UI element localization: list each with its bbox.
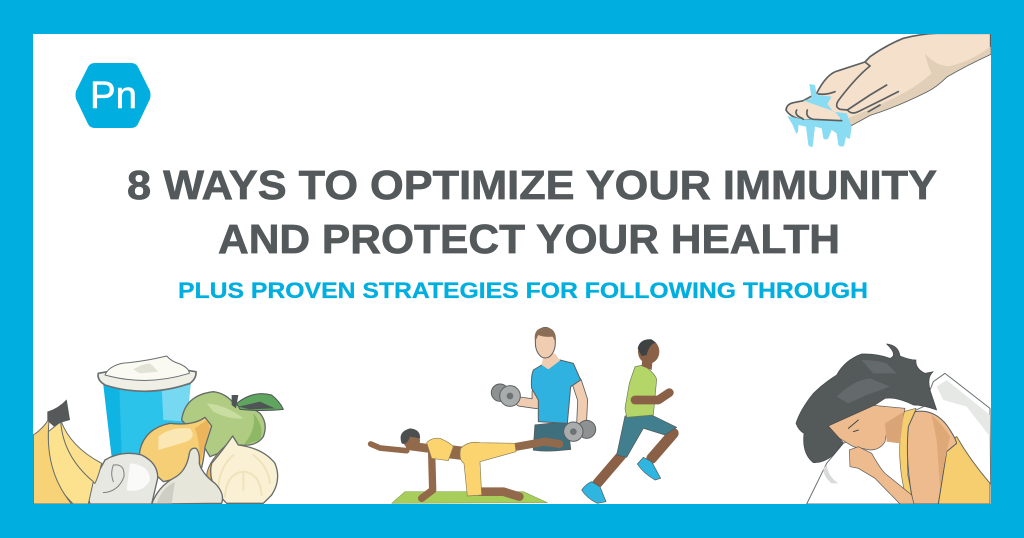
figure: runner [582, 339, 677, 503]
icon: white onion [207, 436, 278, 503]
figure: woman balancing on yoga mat [371, 428, 559, 503]
icon: hand with soap water [786, 33, 991, 147]
illustration: healthy foods [33, 356, 283, 504]
icon: yellow onion [140, 417, 212, 482]
title [127, 162, 937, 262]
subtitle: PLUS PROVEN STRATEGIES FOR FOLLOWING THROUGH [178, 278, 868, 303]
water [787, 84, 852, 147]
illustration: people exercising [371, 327, 677, 503]
icon: garlic bulb left [88, 453, 158, 504]
icon: yogurt cup [98, 356, 196, 457]
title: AND PROTECT YOUR HEALTH [218, 216, 840, 262]
icon: garlic bulb right [152, 448, 222, 504]
logo: Pn hexagon [76, 63, 150, 128]
logo: Pn hexagon: Pn [90, 75, 137, 117]
icon: bananas [33, 399, 102, 504]
icon: green apple [182, 392, 283, 457]
figure: man with dumbbells [491, 327, 596, 451]
figure: sleeping woman [796, 344, 990, 504]
title: 8 WAYS TO OPTIMIZE YOUR IMMUNITY [127, 162, 937, 208]
icon: pillow [807, 373, 991, 504]
illustration: woman sleeping [796, 344, 991, 504]
